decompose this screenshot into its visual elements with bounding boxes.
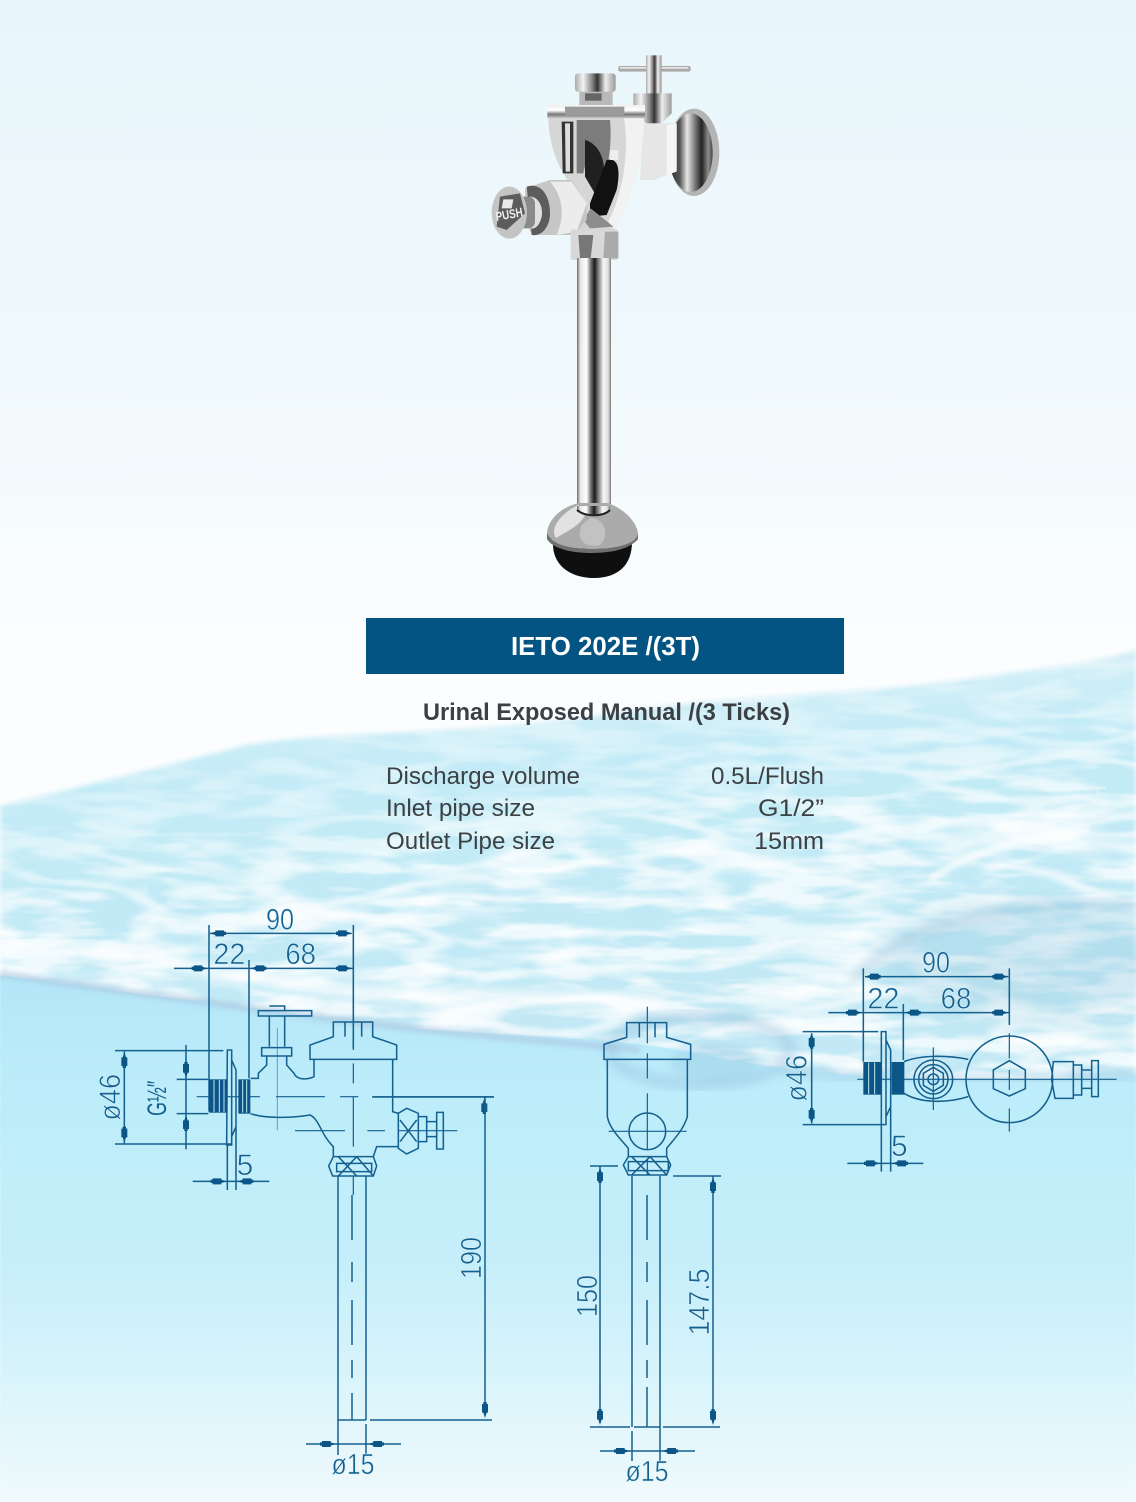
specification list: Inlet pipe size: [386, 795, 535, 822]
subtitle: Urinal Exposed Manual /(3 Ticks): [423, 699, 790, 726]
valve top cap: [547, 73, 645, 118]
product photo: chrome flush valve: [492, 55, 719, 260]
dimension labels: G½″: [142, 1081, 172, 1116]
specification list: 15mm: [754, 828, 824, 855]
dimension labels: [94, 903, 316, 1182]
side view: lower pipe and dimensions: [306, 1097, 494, 1481]
dimension labels: 5: [237, 1149, 253, 1182]
pipe collar: [571, 229, 618, 260]
background: lower clear water: [0, 975, 1136, 1502]
dimension labels: 5: [891, 1130, 908, 1163]
push button with label: PUSH: [495, 205, 524, 224]
dimension labels: 22: [213, 938, 245, 971]
wall flange: [640, 109, 719, 196]
technical drawing: side view: [94, 903, 494, 1195]
dimension labels: ø46: [94, 1074, 127, 1121]
dimension labels: 68: [285, 938, 316, 971]
top view outline: [803, 968, 1117, 1172]
dimension labels: 68: [941, 983, 971, 1016]
background: water surface with ripples: [0, 640, 1136, 1170]
thread blocks: [863, 1062, 904, 1095]
dimension labels: ø46: [781, 1055, 814, 1102]
technical drawing: top view: [781, 947, 1117, 1172]
front view: lower pipe and dimensions: 150: [572, 1275, 604, 1317]
handle: stop tick: [618, 55, 691, 123]
side view: lower pipe and dimensions: ø15: [332, 1449, 374, 1481]
technical drawing: front view: [604, 1007, 691, 1175]
title banner: [366, 618, 844, 674]
specification list: [386, 763, 824, 855]
side view outline: [115, 925, 494, 1195]
arrowheads: [121, 930, 487, 1184]
dimension labels: 90: [266, 903, 294, 936]
specification list: 0.5L/Flush: [711, 763, 824, 790]
push button with label: [492, 180, 587, 239]
specification list: Discharge volume: [386, 763, 580, 790]
dimension labels: 22: [867, 983, 899, 1016]
front view: lower pipe and dimensions: ø15: [626, 1456, 668, 1488]
thread blocks: [209, 1079, 250, 1114]
vertical pipe: [577, 258, 611, 514]
arrowheads: [809, 974, 1008, 1166]
faint cursor mark on the water: [1090, 788, 1106, 820]
title banner: IETO 202E /(3T): [511, 631, 700, 661]
background: horizon band and swirl: [0, 974, 1136, 1084]
front view outline: [604, 1007, 691, 1175]
front view: lower pipe and dimensions: 147.5: [684, 1268, 716, 1336]
specification list: Outlet Pipe size: [386, 828, 555, 855]
valve body: [548, 118, 644, 230]
front view: lower pipe and dimensions: [572, 1166, 721, 1488]
floor base and seal: [547, 503, 638, 578]
side view: lower pipe and dimensions: 190: [456, 1237, 488, 1279]
specification list: G1/2”: [758, 795, 824, 822]
dimension labels: [781, 947, 971, 1163]
dimension labels: 90: [922, 947, 950, 980]
